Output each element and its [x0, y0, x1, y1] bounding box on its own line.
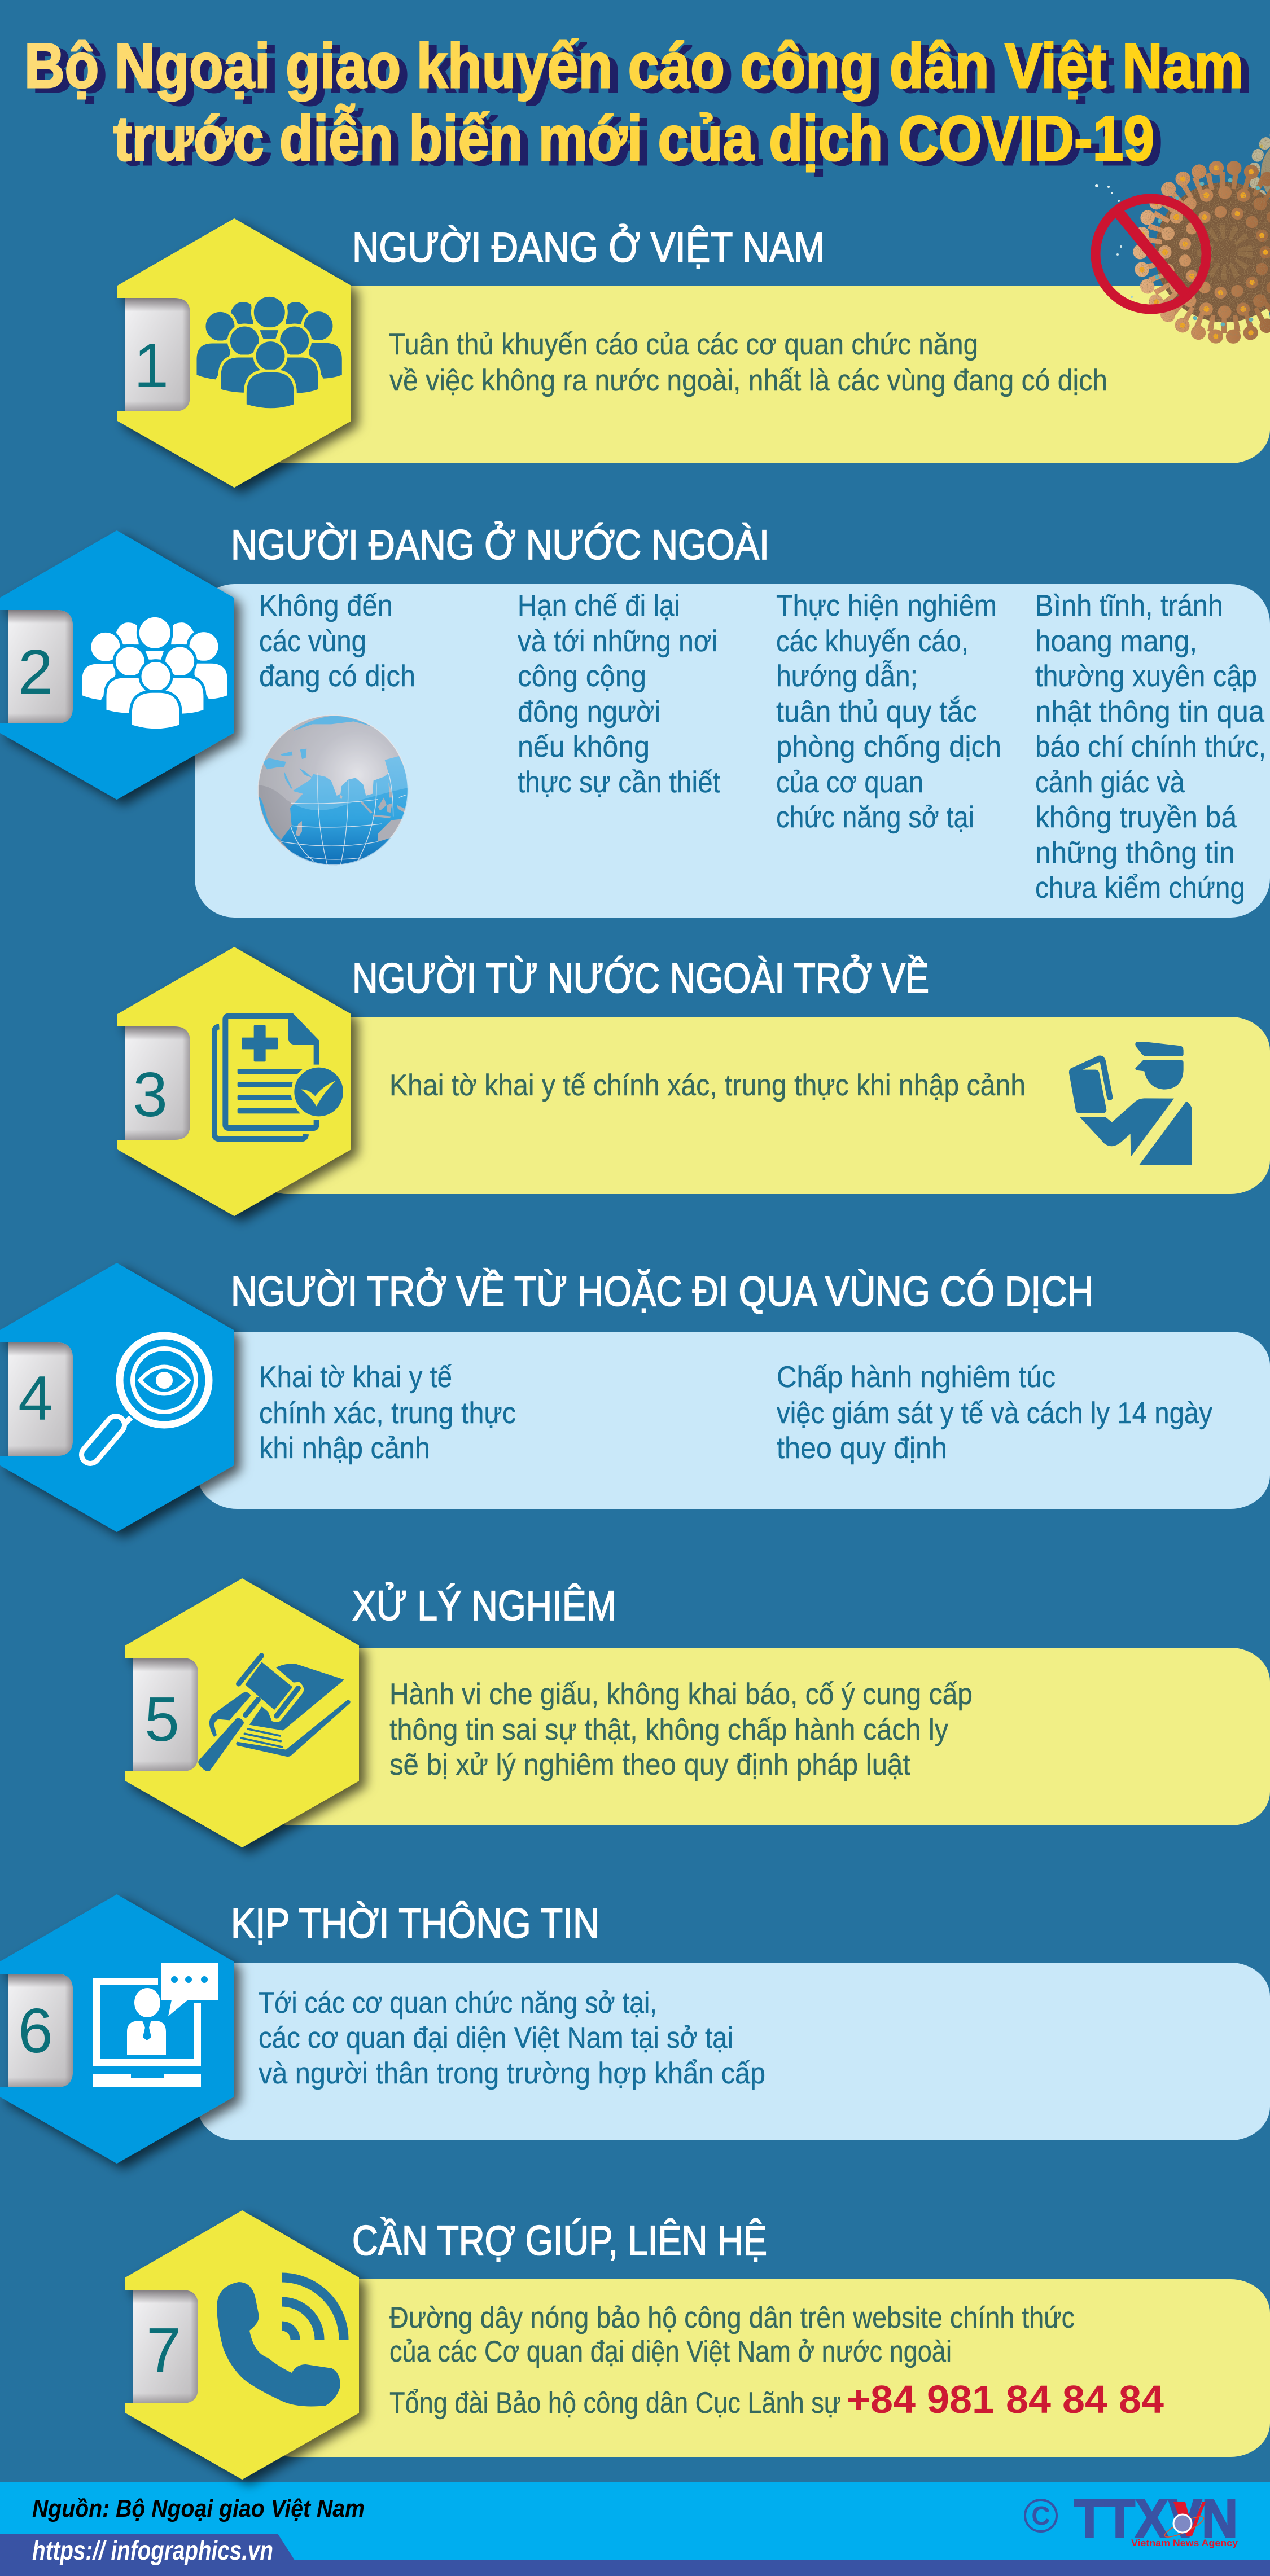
section 2 column 2 text: đông người	[518, 695, 660, 729]
icon: computer with speech bubble	[93, 1959, 222, 2087]
section 4 right text: Chấp hành nghiêm túc	[777, 1361, 1056, 1394]
number 6: 6	[18, 1996, 53, 2066]
panel: section 7 background	[254, 2279, 1270, 2457]
badge: section 7 hexagon	[125, 2210, 359, 2480]
icon: group of people	[195, 295, 343, 410]
section 2 column 1 text	[259, 589, 415, 693]
panel: section 2 background	[195, 584, 1270, 918]
source text: Nguồn: Bộ Ngoại giao Việt Nam	[32, 2495, 365, 2522]
section 2 column 3 text: Thực hiện nghiêm	[776, 589, 997, 622]
section 4 right text: việc giám sát y tế và cách ly 14 ngày	[777, 1397, 1212, 1430]
section 2 column 4 text: không truyền bá	[1035, 801, 1237, 834]
section 2 column 3 text: tuân thủ quy tắc	[776, 695, 977, 729]
section 2 column 4 text: cảnh giác và	[1035, 766, 1185, 799]
section 6 text	[259, 1986, 765, 2090]
section 2 column 3 text: phòng chống dịch	[776, 730, 1001, 763]
panel: section 3 background	[248, 1017, 1270, 1194]
section 7 text	[389, 2301, 1075, 2420]
section 2 column 3 text: các khuyến cáo,	[776, 625, 969, 658]
section 2 column 1 text: đang có dịch	[259, 660, 415, 693]
section 2 heading: NGƯỜI ĐANG Ở NƯỚC NGOÀI	[231, 521, 769, 568]
section 2 column 4 text: chưa kiểm chứng	[1035, 871, 1245, 905]
section 6 heading: KỊP THỜI THÔNG TIN	[231, 1900, 599, 1947]
number 2: 2	[18, 637, 53, 707]
section 3 text: Khai tờ khai y tế chính xác, trung thực khi nhập cảnh	[389, 1069, 1026, 1102]
icon: magnifier with eye	[90, 1336, 209, 1455]
section 4 left text: Khai tờ khai y tế	[259, 1361, 452, 1394]
logo: TTXVN: Vietnam News Agency	[1131, 2538, 1238, 2548]
section 6 text: các cơ quan đại diện Việt Nam tại sở tại	[259, 2021, 733, 2055]
section 4 left text: khi nhập cảnh	[259, 1432, 430, 1465]
section 2 column 3 text: của cơ quan	[776, 766, 923, 799]
section 6 text: và người thân trong trường hợp khẩn cấp	[259, 2057, 765, 2090]
icon: coronavirus	[1095, 128, 1270, 337]
number 5: 5	[144, 1684, 179, 1754]
section 2 column 2 text: Hạn chế đi lại	[518, 589, 680, 622]
badge: section 4 hexagon	[0, 1263, 234, 1532]
icon: globe	[256, 713, 412, 869]
section 2 column 4 text: hoang mang,	[1035, 625, 1197, 658]
panel: section 1 background	[248, 286, 1270, 463]
badge: section 2 hexagon	[0, 530, 234, 800]
section 1 text: Tuân thủ khuyến cáo của các cơ quan chức năng	[389, 328, 978, 361]
section 2 column 2 text	[518, 589, 720, 799]
number 7: 7	[146, 2315, 181, 2385]
icon: phone with signal	[217, 2277, 344, 2406]
section 5 text	[389, 1678, 973, 1781]
section 2 column 3 text: hướng dẫn;	[776, 660, 918, 693]
section 4 left text	[259, 1361, 516, 1465]
section 2 column 2 text: nếu không	[518, 730, 650, 763]
panel: section 6 background	[198, 1963, 1270, 2140]
section 7 text: Đường dây nóng bảo hộ công dân trên website chính thức	[389, 2301, 1075, 2334]
badge: section 6 hexagon	[0, 1894, 234, 2164]
section 4 left text: chính xác, trung thực	[259, 1397, 516, 1430]
section 2 column 4 text: những thông tin	[1035, 836, 1235, 870]
hotline number: +84 981 84 84 84	[847, 2377, 1164, 2421]
section 7 text: của các Cơ quan đại diện Việt Nam ở nước ngoài	[389, 2335, 952, 2368]
section 6 text: Tới các cơ quan chức năng sở tại,	[259, 1986, 657, 2020]
section 2 column 2 text: và tới những nơi	[518, 625, 717, 658]
section 5 text: Hành vi che giấu, không khai báo, cố ý cung cấp	[389, 1678, 973, 1711]
footer band	[0, 2482, 1270, 2576]
number 4: 4	[18, 1363, 53, 1433]
website link text: https:// infographics.vn	[32, 2536, 273, 2566]
panel: section 4 background	[198, 1332, 1270, 1509]
title	[24, 30, 1251, 178]
section 7 text: Tổng đài Bảo hộ công dân Cục Lãnh sự	[389, 2386, 841, 2420]
section 5 heading: XỬ LÝ NGHIÊM	[352, 1582, 616, 1629]
title: trước diễn biến mới của dịch COVID-19	[113, 103, 1154, 174]
section 2 column 4 text: Bình tĩnh, tránh	[1035, 589, 1223, 622]
number 3: 3	[133, 1060, 168, 1130]
section 4 right text: theo quy định	[777, 1432, 947, 1465]
section 1 text	[389, 328, 1107, 397]
icon: immigration officer	[1069, 1042, 1192, 1165]
section 2 column 4 text	[1035, 589, 1266, 905]
section 3 heading: NGƯỜI TỪ NƯỚC NGOÀI TRỞ VỀ	[352, 955, 929, 1002]
section 5 text: thông tin sai sự thật, không chấp hành cách ly	[389, 1713, 948, 1746]
section 2 column 3 text	[776, 589, 1001, 834]
badge: section 3 hexagon	[117, 947, 351, 1216]
number 1: 1	[134, 331, 169, 401]
section 2 column 2 text: công cộng	[518, 660, 646, 693]
section 7 heading: CẦN TRỢ GIÚP, LIÊN HỆ	[352, 2217, 767, 2264]
section 2 column 1 text: Không đến	[259, 589, 393, 622]
section 4 right text	[777, 1361, 1212, 1465]
section 1 text: về việc không ra nước ngoài, nhất là các vùng đang có dịch	[389, 364, 1107, 397]
section 5 text: sẽ bị xử lý nghiêm theo quy định pháp luật	[389, 1748, 910, 1781]
section 2 column 4 text: nhật thông tin qua	[1035, 695, 1264, 729]
icon: group of people white	[81, 616, 229, 730]
section 4 heading: NGƯỜI TRỞ VỀ TỪ HOẶC ĐI QUA VÙNG CÓ DỊCH	[231, 1268, 1093, 1315]
section 2 column 1 text: các vùng	[259, 625, 366, 658]
icon: gavel and book	[198, 1656, 351, 1771]
section 1 heading: NGƯỜI ĐANG Ở VIỆT NAM	[352, 224, 825, 271]
icon: medical form	[214, 1014, 343, 1139]
section 2 column 3 text: chức năng sở tại	[776, 801, 974, 834]
logo: TTXVN: C	[1031, 2501, 1050, 2530]
icon: prohibition sign	[1096, 199, 1206, 309]
badge: section 5 hexagon	[125, 1578, 359, 1847]
badge: section 1 hexagon	[117, 218, 351, 488]
section 2 column 2 text: thực sự cần thiết	[518, 766, 720, 799]
logo: TTXVN: TTXVN	[1074, 2489, 1238, 2549]
panel: section 5 background	[254, 1648, 1270, 1825]
